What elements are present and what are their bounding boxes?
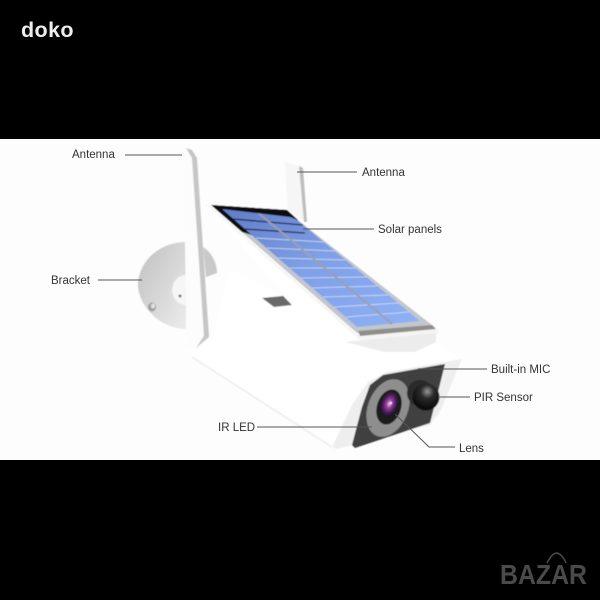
callout: antenna right: Antenna — [362, 167, 405, 179]
left antenna — [183, 147, 209, 348]
lens — [372, 386, 406, 428]
front bezel — [332, 359, 462, 449]
logo: Bazar: BAZAR — [500, 559, 587, 590]
callout: lens — [395, 414, 484, 455]
callout: bracket: Bracket — [51, 275, 91, 287]
solar panel — [211, 205, 436, 336]
callout: antenna left: Antenna — [72, 149, 115, 161]
solar panel frame — [205, 203, 438, 352]
callout: built-in MIC — [418, 364, 550, 376]
logo: doko: doko — [21, 18, 74, 42]
camera illustration — [138, 147, 462, 449]
solar cells — [222, 209, 420, 327]
callout: solar panels — [303, 224, 442, 236]
callout: IR LED: IR LED — [218, 422, 255, 434]
callout: antenna left — [72, 149, 182, 161]
callout: solar panels: Solar panels — [378, 224, 442, 236]
callout: built-in MIC: Built-in MIC — [491, 364, 550, 376]
callout: PIR sensor — [438, 392, 533, 404]
callout: bracket — [51, 275, 142, 287]
callout: lens: Lens — [459, 443, 484, 455]
right antenna — [285, 162, 307, 222]
callout: antenna right — [297, 167, 405, 179]
callout: PIR sensor: PIR Sensor — [474, 392, 533, 404]
photo panel — [0, 139, 600, 460]
bracket — [138, 242, 217, 329]
camera body — [192, 270, 462, 449]
PIR sensor — [407, 380, 440, 410]
IR LED ring — [358, 373, 418, 443]
